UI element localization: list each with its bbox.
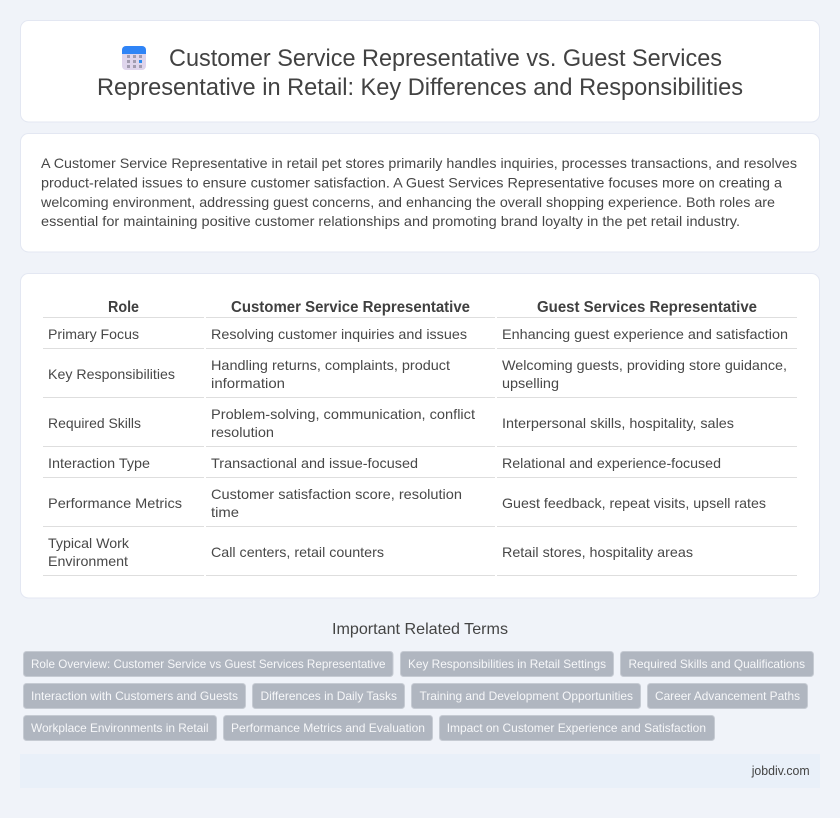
table row: performance metrics: Customer satisfaction score, resolution: [211, 486, 462, 502]
table row: required skills: Required Skills: [48, 415, 141, 431]
table row: interaction type: Relational and experience-focused: [502, 455, 721, 471]
table row: key responsibilities: Welcoming guests, providing store guidance,: [502, 357, 787, 373]
table header row: [43, 299, 797, 318]
table row: performance metrics: Guest feedback, repeat visits, upsell rates: [502, 495, 766, 511]
table row: required skills: Problem-solving, communication, conflict: [211, 406, 475, 422]
tag: career: [648, 684, 808, 708]
table row: performance metrics: Performance Metrics: [48, 495, 182, 511]
table row: typical work environment: Environment: [48, 553, 128, 569]
panel: related term tags: [24, 652, 814, 740]
table row: primary focus: Primary Focus: [48, 326, 139, 342]
table row: primary focus: Resolving customer inquiries and issues: [211, 326, 467, 342]
tag: interaction: [24, 684, 246, 708]
tag: workplace: [24, 716, 216, 740]
tag: impact: [440, 716, 714, 740]
table row: typical work environment: Retail stores, hospitality areas: [502, 544, 693, 560]
table row: typical work environment: [43, 535, 797, 576]
tag: career: Career Advancement Paths: [655, 689, 800, 703]
icon: calendar: [122, 46, 146, 70]
table row: key responsibilities: Key Responsibilities: [48, 366, 175, 382]
table row: required skills: Interpersonal skills, hospitality, sales: [502, 415, 734, 431]
tag: impact: Impact on Customer Experience and Satisfaction: [447, 721, 706, 735]
table row: key responsibilities: Handling returns, complaints, product: [211, 357, 450, 373]
panel: comparison table: [20, 274, 820, 598]
table row: key responsibilities: information: [211, 375, 285, 391]
table row: key responsibilities: [43, 357, 797, 398]
tag: role overview: Role Overview: Customer Service vs Guest Services Representative: [31, 657, 386, 671]
tag: performance: Performance Metrics and Evaluation: [231, 721, 425, 735]
table header row: Role: [108, 299, 139, 316]
table row: performance metrics: [43, 486, 797, 527]
table row: interaction type: Interaction Type: [48, 455, 150, 471]
title: [97, 45, 743, 101]
table row: key responsibilities: upselling: [502, 375, 559, 391]
panel: title header: [20, 20, 820, 122]
text block: introduction paragraph: A Customer Service Representative in retail pet stores primarily handles inquiries, processes transactions, and resolves: [41, 155, 797, 171]
tag: training: [412, 684, 640, 708]
title: Customer Service Representative vs. Guest Services: [169, 45, 722, 72]
table row: interaction type: Transactional and issue-focused: [211, 455, 418, 471]
table header row: Guest Services Representative: [537, 299, 757, 316]
table row: primary focus: [43, 326, 797, 349]
tag: required skills: [620, 652, 814, 676]
tag: interaction: Interaction with Customers and Guests: [31, 689, 238, 703]
text block: introduction paragraph: product-related issues to ensure customer satisfaction. A Guest Services Representative focuses more on creating a: [41, 174, 782, 190]
tag: role overview: [24, 652, 393, 676]
tag: training: Training and Development Opportunities: [420, 689, 633, 703]
table row: required skills: resolution: [211, 424, 274, 440]
table row: performance metrics: time: [211, 504, 239, 520]
text block: introduction paragraph: essential for maintaining positive customer relationships and promoting brand loyalty in the pet retail industry.: [41, 213, 740, 229]
tag: performance: [224, 716, 432, 740]
text block: introduction paragraph: [40, 155, 797, 229]
text block: introduction paragraph: welcoming environment, addressing guest concerns, and enhancing the overall shopping experience. Both roles are: [40, 194, 775, 210]
tag: workplace: Workplace Environments in Retail: [31, 721, 208, 735]
table row: typical work environment: Typical Work: [48, 535, 130, 551]
table row: required skills: [43, 406, 797, 447]
footer: jobdiv.com: [751, 764, 810, 778]
table row: primary focus: Enhancing guest experience and satisfaction: [502, 326, 788, 342]
tag: key responsibilities: [400, 652, 614, 676]
tag: key responsibilities: Key Responsibilities in Retail Settings: [408, 657, 606, 671]
table header row: Customer Service Representative: [231, 299, 470, 316]
title: Representative in Retail: Key Differences and Responsibilities: [97, 74, 743, 101]
tag: daily tasks: [252, 684, 404, 708]
panel: introduction: [20, 134, 820, 252]
tag: required skills: Required Skills and Qualifications: [628, 657, 805, 671]
table row: interaction type: [43, 455, 797, 478]
footer: [20, 754, 820, 788]
tag: daily tasks: Differences in Daily Tasks: [260, 689, 397, 703]
heading: important related terms: Important Related Terms: [332, 621, 508, 638]
table row: typical work environment: Call centers, retail counters: [211, 544, 384, 560]
